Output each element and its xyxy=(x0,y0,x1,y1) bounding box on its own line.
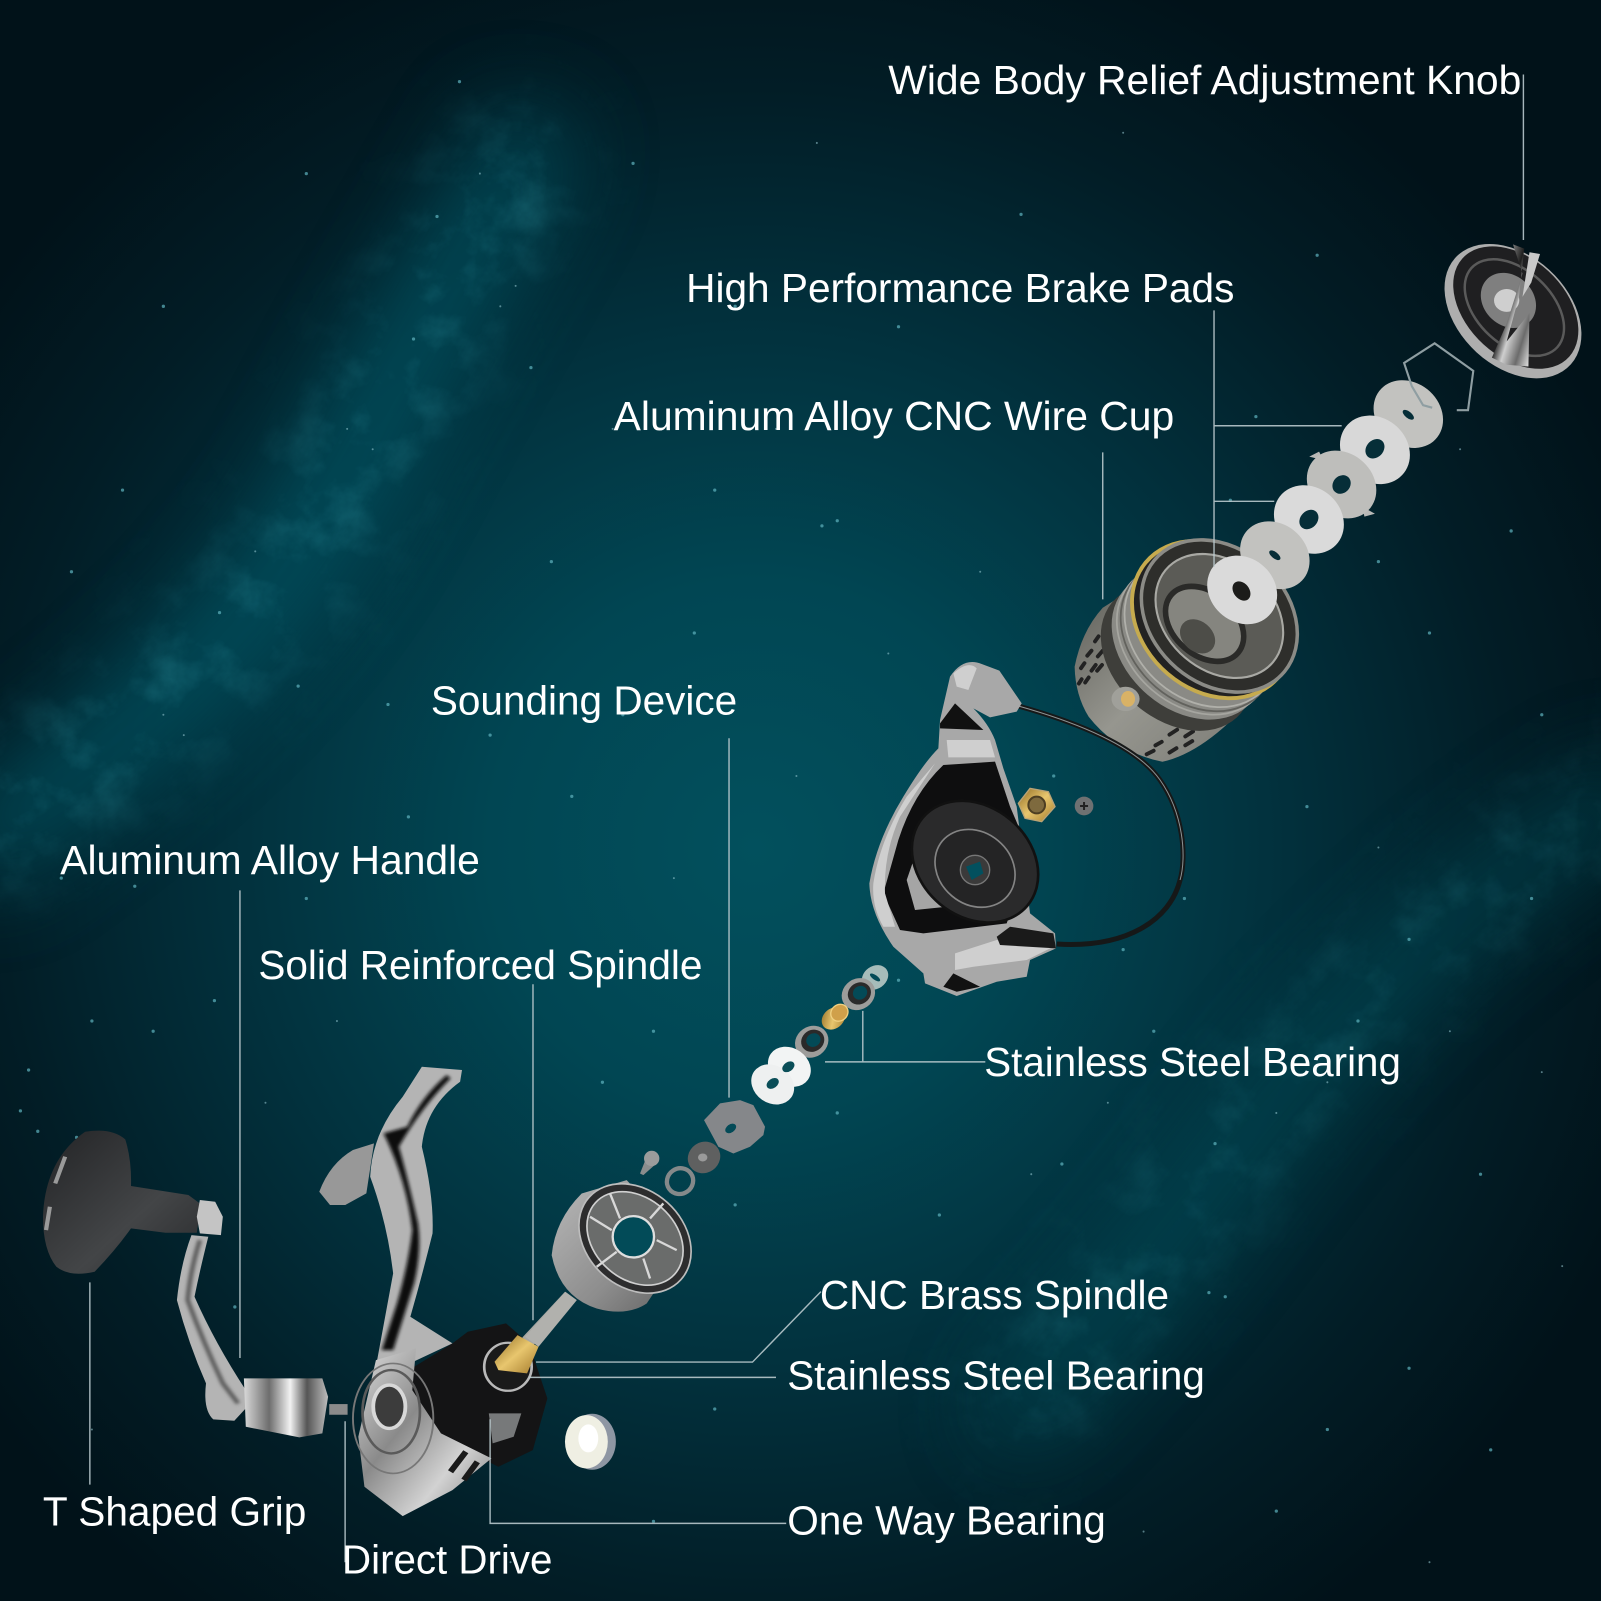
crank arm soft shadow xyxy=(188,1240,238,1403)
knob wing right tip xyxy=(1522,252,1540,297)
crank joint xyxy=(197,1200,223,1235)
leader: solid spindle xyxy=(532,984,534,1320)
spool front rim xyxy=(1111,508,1327,724)
leader: lower stainless bearing xyxy=(529,1376,776,1378)
gearbox black housing xyxy=(410,1323,547,1467)
rotor arm and frame xyxy=(869,662,1056,996)
clutch mechanism xyxy=(489,1413,521,1443)
leader: one way bearing xyxy=(490,1419,786,1523)
gear bearing xyxy=(484,1343,532,1391)
foot lobe xyxy=(319,1143,374,1205)
bail wire xyxy=(1018,706,1183,944)
bearing upper xyxy=(835,972,881,1017)
spindle shaft lower xyxy=(525,1292,577,1347)
gray washer top xyxy=(1360,366,1456,462)
leader: brake pads xyxy=(1214,310,1342,567)
rotor centre hole xyxy=(960,855,990,885)
knob disc xyxy=(1419,217,1601,405)
leader: brass spindle xyxy=(536,1292,821,1362)
part: spool wire cup xyxy=(1072,508,1327,762)
washer holes xyxy=(1229,408,1416,604)
lower body chrome xyxy=(358,1348,491,1516)
gray washer 4 xyxy=(1293,437,1390,532)
felt washer 1 xyxy=(1194,541,1291,638)
gray washer 2 xyxy=(1227,507,1323,603)
label: lower stainless bearing: Stainless Steel Bearing xyxy=(787,1353,1205,1399)
part: handle xyxy=(43,1131,348,1437)
leader: aluminum handle xyxy=(239,890,241,1358)
tiny screw xyxy=(640,1151,659,1175)
handle screw cylinder xyxy=(244,1378,328,1437)
T shaped grip xyxy=(43,1131,201,1274)
brass nut xyxy=(1018,788,1055,822)
brass spindle xyxy=(495,1335,539,1373)
rotor lower opening xyxy=(943,973,980,992)
felt washer 5 xyxy=(1326,401,1423,498)
label: sounding device: Sounding Device xyxy=(431,678,737,724)
threaded tip xyxy=(329,1404,348,1415)
label: direct drive: Direct Drive xyxy=(342,1536,552,1582)
flat washer xyxy=(682,1135,726,1180)
spool brass pin xyxy=(1112,687,1140,711)
spring clip xyxy=(1404,343,1473,410)
drum spokes xyxy=(590,1193,677,1278)
crank arm xyxy=(177,1235,250,1421)
felt washer 3 xyxy=(1260,471,1357,568)
rotor inner black cavity xyxy=(883,762,1030,933)
spool flange xyxy=(1072,555,1281,761)
rotor face disc xyxy=(887,776,1063,948)
label: one way bearing: One Way Bearing xyxy=(787,1498,1106,1544)
small screw xyxy=(1075,797,1093,815)
part: small bearing stack xyxy=(640,960,893,1199)
spool body xyxy=(1075,585,1252,762)
leader: upper stainless bearing xyxy=(825,1011,985,1062)
part: adjustment knob and spring xyxy=(1404,217,1601,410)
rotor chrome highlights xyxy=(873,665,1053,970)
leader: direct drive xyxy=(344,1421,346,1562)
label: aluminum handle: Aluminum Alloy Handle xyxy=(60,837,480,883)
spool inner hub xyxy=(1151,571,1258,677)
brass sleeve xyxy=(817,1001,851,1034)
drum body xyxy=(552,1180,687,1312)
sounding device clip xyxy=(704,1100,765,1153)
stalk and foot xyxy=(370,1067,462,1367)
spool vent holes xyxy=(1079,636,1193,754)
brass nut hole xyxy=(1028,797,1045,813)
part: brake pad washers xyxy=(1194,366,1456,638)
bearing lower xyxy=(789,1019,835,1064)
o-ring xyxy=(662,1163,698,1199)
leader: adjustment knob xyxy=(1522,75,1524,240)
stalk dark reflection xyxy=(382,1075,451,1350)
grip side slots xyxy=(46,1157,65,1230)
spindle shaft upper xyxy=(518,1292,575,1350)
white washers xyxy=(743,1038,819,1113)
label: wire cup: Aluminum Alloy CNC Wire Cup xyxy=(614,393,1174,439)
knob wing handle xyxy=(1492,244,1529,367)
leader: wire cup xyxy=(1102,452,1104,599)
label: brake pads: High Performance Brake Pads xyxy=(686,265,1234,311)
drum centre hole xyxy=(613,1216,654,1257)
leader: sounding device xyxy=(728,738,730,1098)
spool gold ring xyxy=(1101,508,1324,731)
label: solid spindle: Solid Reinforced Spindle xyxy=(258,942,702,988)
label: upper stainless bearing: Stainless Steel Bearing xyxy=(984,1039,1401,1085)
part: spindle drum xyxy=(518,1161,713,1350)
drum face xyxy=(557,1161,713,1316)
side port xyxy=(373,1385,405,1428)
rotor lower lever xyxy=(997,927,1056,948)
label: brass spindle: CNC Brass Spindle xyxy=(820,1272,1169,1318)
label: T shaped grip: T Shaped Grip xyxy=(43,1488,306,1534)
leader: T shaped grip xyxy=(89,1282,91,1485)
spool thread section xyxy=(1083,525,1309,750)
label: adjustment knob: Wide Body Relief Adjustment Knob xyxy=(888,57,1521,103)
part: reel body xyxy=(319,1067,616,1516)
washer tabs xyxy=(1309,452,1375,517)
rotor neck dark xyxy=(940,703,983,730)
lower body slots xyxy=(451,1452,477,1480)
one way bearing xyxy=(565,1414,616,1470)
thin washer xyxy=(857,960,893,995)
part: rotor cup xyxy=(869,662,1183,996)
lower body concentric rings xyxy=(353,1363,433,1473)
